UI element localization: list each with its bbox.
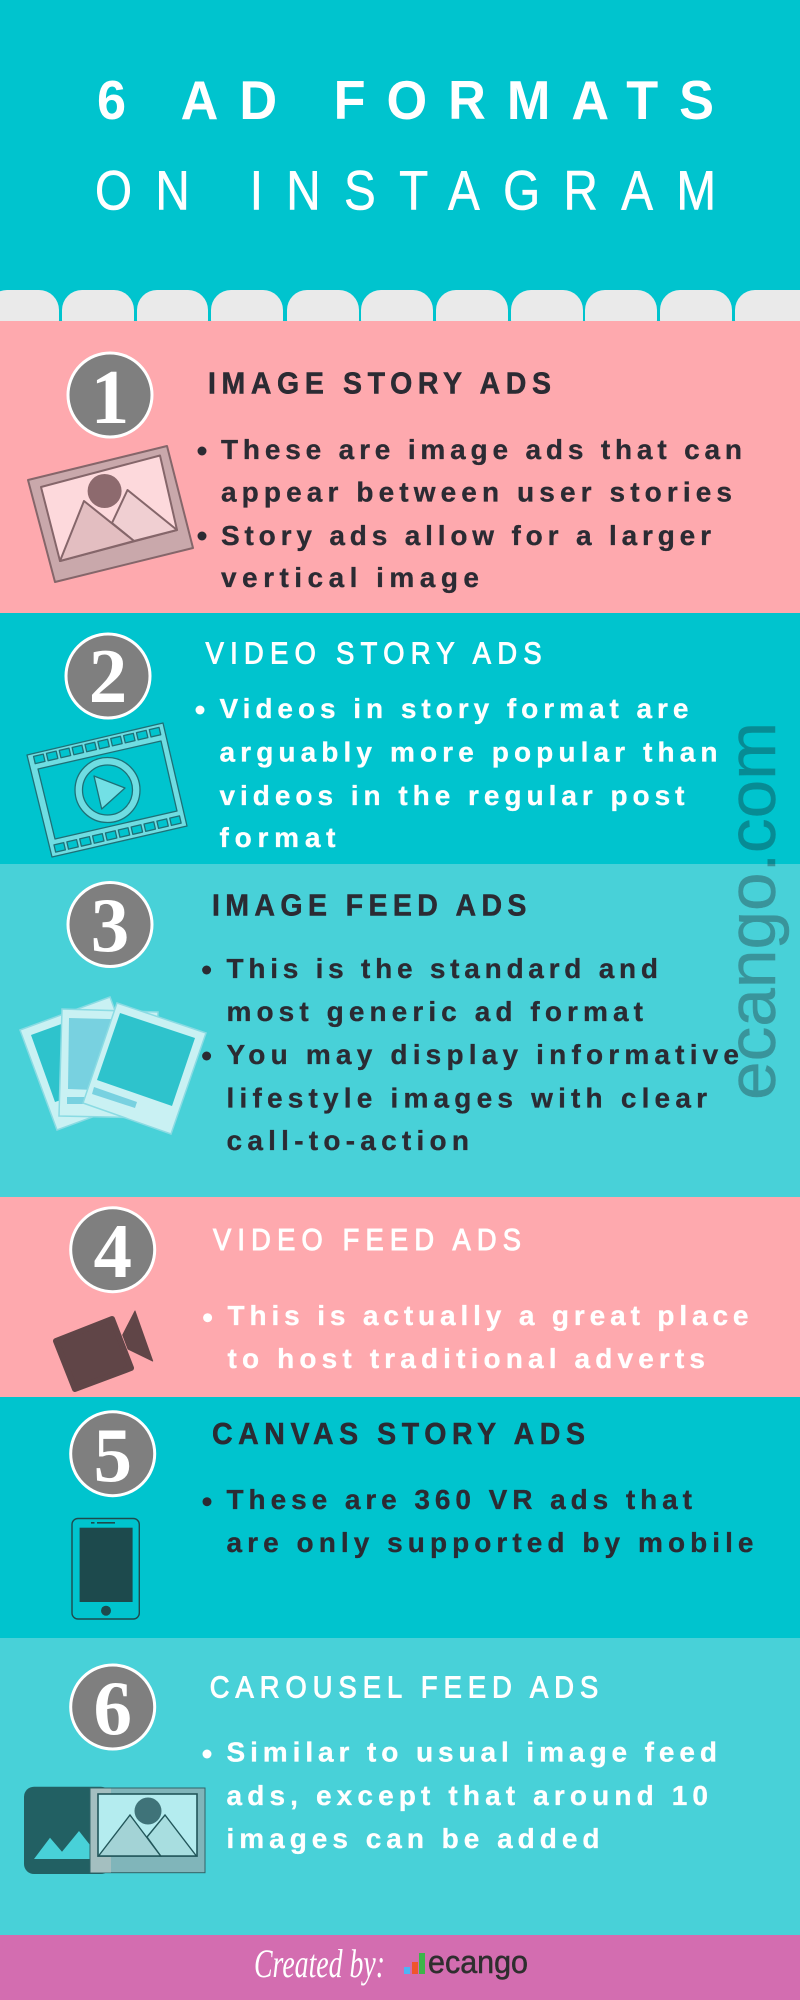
bullet text: image feed ads: This is the standard and [226,953,658,984]
bullet text: image story ads: appear between user stories [221,476,732,508]
icon: film strip with play button [27,723,187,857]
number badge 6 [71,1665,155,1751]
bullet text: video story ads: Videos in story format are [220,693,688,724]
panel: image feed ads [0,864,800,1197]
number badge 3: 3 [91,882,129,968]
heading: carousel feed ads: CAROUSEL FEED ADS [210,1671,598,1705]
bullet text: video story ads: videos in the regular post [220,780,684,811]
bullet text: video feed ads: This is actually a great place [228,1300,748,1331]
bullet text: video story ads: format [220,822,336,853]
bullet text: video story ads [196,693,718,853]
heading: video feed ads: VIDEO FEED ADS [213,1223,521,1257]
bullet text: image feed ads: call-to-action [226,1125,469,1156]
number badge 1 [68,353,152,440]
bullet text: video feed ads [203,1300,749,1374]
heading: image feed ads: IMAGE FEED ADS [212,888,526,923]
title: 6 AD FORMATS [97,70,714,131]
panel: image story ads [0,321,800,613]
number badge 4 [71,1208,155,1294]
bullet text: carousel feed ads: images can be added [226,1823,600,1854]
bullet text: image story ads: These are image ads that can [221,434,742,465]
scalloped divider [0,290,800,340]
heading: video story ads: VIDEO STORY ADS [206,637,542,671]
bullet text: carousel feed ads [202,1737,717,1854]
icon: smartphone [72,1518,139,1619]
number badge 4: 4 [93,1208,132,1294]
bullet text: canvas story ads [202,1484,754,1558]
icon: video camera [56,1311,153,1389]
bullet text: canvas story ads: These are 360 VR ads that [226,1484,692,1515]
bullet text: video story ads: arguably more popular than [220,736,718,768]
logo: ecango: ecango [428,1944,528,1980]
panel: carousel feed ads [0,1638,800,1935]
bullet text: image story ads [198,434,742,593]
number badge 5: 5 [93,1412,132,1498]
bullet text: image feed ads: You may display informative [226,1039,739,1070]
panel: video story ads [0,613,800,864]
bullet text: image feed ads [202,953,739,1156]
icon: stack of photos [20,997,206,1134]
bullet text: carousel feed ads: ads, except that around 10 [226,1780,708,1811]
vertical watermark: ecango.com: ecango.com [714,722,790,1100]
header panel [0,0,800,321]
heading: image story ads: IMAGE STORY ADS [208,366,551,401]
bullet text: image feed ads: most generic ad format [226,996,643,1027]
bullet text: image story ads: Story ads allow for a larger [221,520,711,551]
title [95,70,716,222]
number badge 1: 1 [91,354,129,440]
created by script: Created by: [254,1941,385,1986]
bullet text: canvas story ads: are only supported by mobile [226,1527,754,1558]
title: ON INSTAGRAM [95,160,716,222]
icon: tilted photo [28,446,193,582]
panel: canvas story ads [0,1397,800,1638]
bullet text: carousel feed ads: Similar to usual image feed [226,1737,717,1768]
bullet text: video feed ads: to host traditional adverts [228,1343,705,1374]
number badge 6: 6 [93,1665,132,1751]
bullet text: image story ads: vertical image [221,562,479,593]
bullet text: image feed ads: lifestyle images with clear [226,1082,707,1114]
number badge 2: 2 [89,633,127,719]
footer panel [0,1935,800,2000]
number badge 3 [68,882,152,968]
panel: video feed ads [0,1197,800,1397]
number badge 5 [71,1412,155,1498]
heading: canvas story ads: CANVAS STORY ADS [212,1417,585,1451]
number badge 2 [66,633,150,719]
icon: carousel images [24,1787,205,1874]
